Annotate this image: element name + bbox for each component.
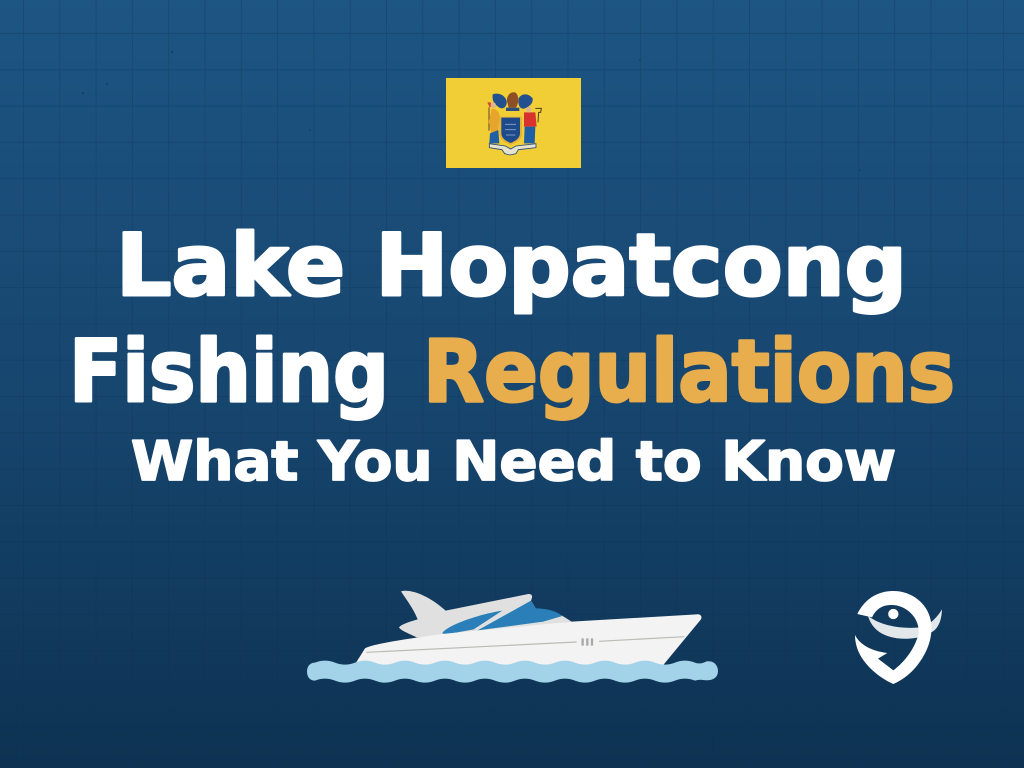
fish band xyxy=(868,609,942,639)
hull stripe xyxy=(366,637,684,652)
fish eye xyxy=(888,609,898,619)
icon: boat xyxy=(307,591,718,683)
icon: New Jersey flag xyxy=(446,78,581,168)
boat cabin xyxy=(399,591,572,637)
boat hull xyxy=(354,614,701,665)
fish outline xyxy=(855,591,931,684)
icon: fish logo xyxy=(855,591,942,684)
title line 2: Fishing xyxy=(69,322,389,422)
title line 2: Regulations xyxy=(423,322,955,422)
boat windows xyxy=(442,611,502,635)
title line 2 xyxy=(69,322,955,422)
subtitle: What You Need to Know xyxy=(131,430,896,493)
title line 1: Lake Hopatcong xyxy=(116,216,907,316)
water waves xyxy=(307,661,718,683)
